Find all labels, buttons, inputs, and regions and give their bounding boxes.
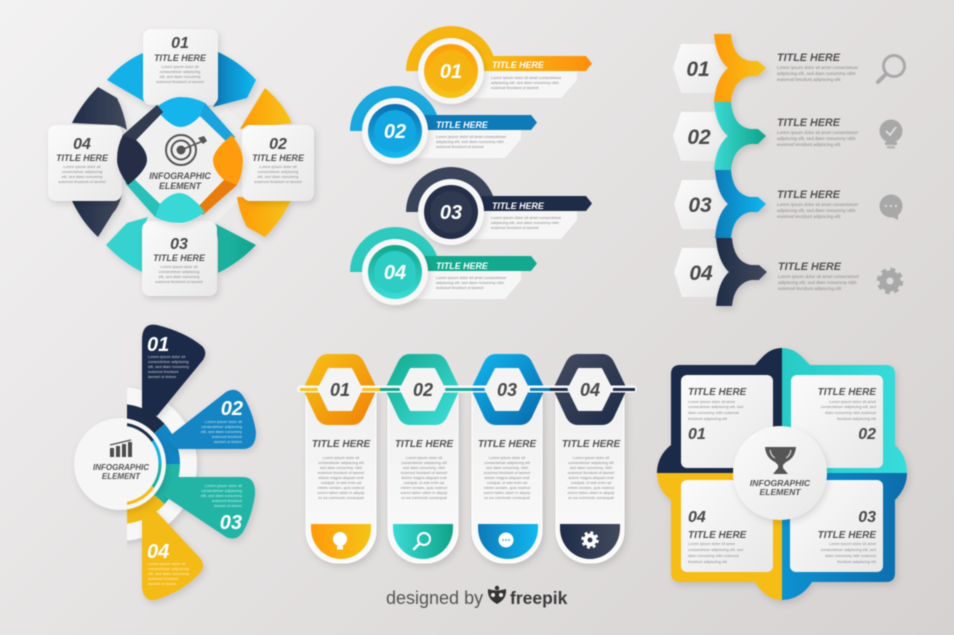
step 04 <box>674 238 860 306</box>
item 03 <box>406 167 592 245</box>
number hexagons <box>319 370 611 410</box>
center label: ELEMENT <box>159 181 202 191</box>
column 2 text: dolore magna aliquam erat <box>401 476 448 480</box>
column 2 text: Lorem ipsum dolor sit <box>406 456 442 460</box>
petal 04: elit, sed diam nonummy <box>148 571 189 576</box>
column 3 text: dolore magna aliquam erat <box>484 476 531 480</box>
card 04: tincidunt adipiscing elit <box>688 559 728 564</box>
petal 01: consectetuer adipiscing <box>148 359 189 364</box>
card 03: 03 <box>858 509 876 526</box>
card 02: consectetuer adipiscing elit, sed <box>821 404 876 409</box>
card 03: tincidunt adipiscing elit <box>837 559 877 564</box>
step 02 <box>673 102 859 170</box>
card 01: TITLE HERE <box>154 53 207 63</box>
icon: gear <box>879 270 901 292</box>
petal 02 <box>167 390 256 449</box>
column titles <box>312 439 620 450</box>
step 04: adipiscing elit, sed diam nonummy nibh <box>778 280 857 285</box>
icon: freepik logo <box>488 586 506 604</box>
item 02: euismod tincidunt ut laoreet <box>436 144 484 149</box>
item 01: adipiscing elit, sed diam nonummy nibh <box>491 80 559 85</box>
petal 04: euismod tincidunt <box>148 576 179 581</box>
card 01: Lorem ipsum dolor sit amet <box>688 399 735 404</box>
icon block: gear <box>560 524 620 559</box>
column 1 text: volutpat, ut wisi enim ad <box>321 481 361 485</box>
step 04: Lorem ipsum dolor sit amet consectetuer <box>778 274 859 279</box>
item 03: euismod tincidunt ut laoreet <box>491 225 539 230</box>
card 04: euismod tincidunt ut laoreet <box>58 179 107 184</box>
column 1 text: dolore magna aliquam erat <box>318 476 365 480</box>
step 02: TITLE HERE <box>777 117 841 129</box>
center label: ELEMENT <box>102 472 141 481</box>
petal 01: 01 <box>147 334 169 356</box>
column titles: TITLE HERE <box>478 439 536 450</box>
card 01: consectetuer adipiscing <box>160 69 200 74</box>
petal 02: elit, sed diam nonummy <box>201 429 242 434</box>
column cards <box>306 390 624 563</box>
card 03: euismod tincidunt ut laoreet <box>155 279 204 284</box>
column 3 text: exerci tation ullam in aliquip <box>484 491 530 495</box>
card 03: Lorem ipsum dolor sit amet <box>829 541 876 546</box>
column 4 text: consectetuer adipiscing elit <box>568 461 615 465</box>
column 4 text: exerci tation ullam in aliquip <box>568 491 614 495</box>
card 01: 01 <box>688 426 706 443</box>
card 04: 04 <box>688 509 706 526</box>
item 03: Lorem ipsum dolor sit amet consectetuer <box>491 215 561 220</box>
column 2 text: consectetuer adipiscing elit <box>401 461 448 465</box>
center label: ELEMENT <box>759 487 801 497</box>
column 3 text: euismod tincidunt ut laoreet <box>484 471 531 475</box>
card 02: TITLE HERE <box>818 387 876 398</box>
icon block: chat <box>478 524 538 559</box>
petal 03: consectetuer adipiscing <box>201 488 242 493</box>
credit: designed by freepik <box>386 586 568 608</box>
card 04: diam nonummy nibh euismod <box>688 553 739 558</box>
card 03: Lorem ipsum dolor sit <box>160 264 198 269</box>
card 02: consectetuer adipiscing <box>258 169 298 174</box>
card 03: TITLE HERE <box>818 530 876 541</box>
step 03: Lorem ipsum dolor sit amet consectetuer <box>777 202 858 207</box>
step 01: euismod tincidunt adipiscing elit <box>777 77 841 82</box>
card 01 <box>681 375 773 468</box>
card 04 <box>48 125 122 201</box>
card 02: Lorem ipsum dolor sit <box>259 164 297 169</box>
card 02: euismod tincidunt ut laoreet <box>254 179 303 184</box>
hexagon 01 <box>303 354 377 425</box>
card 03 <box>142 221 217 296</box>
credit: designed by freepik: designed by <box>386 588 483 608</box>
step 02: 02 <box>687 126 711 149</box>
petal 04: 04 <box>147 541 169 563</box>
petal 04: consectetuer adipiscing <box>148 566 189 571</box>
numbers: 03 <box>497 380 517 400</box>
card 04: Lorem ipsum dolor sit <box>63 164 101 169</box>
numbers: 02 <box>413 380 433 400</box>
panel: four corner quadrant <box>657 348 907 600</box>
item 01: euismod tincidunt ut laoreet <box>491 85 539 90</box>
step 03: euismod tincidunt adipiscing elit <box>777 214 841 219</box>
hexagon 02 <box>385 354 460 425</box>
central ring <box>109 89 251 231</box>
column 4 text: sed diam nonummy, nibh <box>570 466 612 470</box>
petal 02: Lorem ipsum dolor sit <box>205 419 242 424</box>
petal 03 <box>163 477 255 539</box>
step 03: 03 <box>688 194 712 217</box>
card 03: TITLE HERE <box>153 253 206 263</box>
item 01: TITLE HERE <box>492 60 545 70</box>
petal 03: euismod tincidunt <box>212 498 243 503</box>
card 02: elit, sed diam nonummy <box>257 174 299 179</box>
numbers <box>330 380 600 400</box>
center circle <box>733 426 827 520</box>
step 01: adipiscing elit, sed diam nonummy nibh <box>777 71 856 76</box>
hexagon 04 <box>553 354 627 425</box>
card 04: TITLE HERE <box>56 153 109 163</box>
card 03: elit, sed diam nonummy <box>158 274 200 279</box>
column titles: TITLE HERE <box>562 439 620 450</box>
light diamond backing <box>81 61 279 259</box>
petal 01: laoreet ut dolore <box>148 374 176 379</box>
column 2 text: exerci tation ullam in aliquip <box>401 491 447 495</box>
card 03: 03 <box>170 236 188 253</box>
step 01: Lorem ipsum dolor sit amet consectetuer <box>777 65 858 70</box>
fan rings <box>126 388 201 546</box>
column 1 text: minim veniam, quis nostrud <box>318 486 364 490</box>
hexagon 03 <box>471 354 545 425</box>
step 03 <box>674 170 859 238</box>
column 4 text: minim veniam, quis nostrud <box>568 486 614 490</box>
column 4 text: volutpat, ut wisi enim ad <box>571 481 611 485</box>
column 2 text: minim veniam, quis nostrud <box>401 486 447 490</box>
panel: circular infographic <box>48 29 314 296</box>
step 03: TITLE HERE <box>777 189 841 201</box>
card 01: euismod tincidunt ut laoreet <box>156 79 205 84</box>
icon: bar chart <box>110 440 132 457</box>
card 04: consectetuer adipiscing elit, sed <box>688 547 743 552</box>
item 04: 04 <box>384 262 406 284</box>
step 01: 01 <box>686 58 710 81</box>
center circle <box>74 418 166 510</box>
item 02 <box>350 86 537 164</box>
step 03: adipiscing elit, sed diam nonummy nibh <box>777 208 856 213</box>
petal 03: Lorem ipsum dolor sit <box>205 483 242 488</box>
petal 02: consectetuer adipiscing <box>201 424 242 429</box>
card 01: Lorem ipsum dolor sit <box>161 64 199 69</box>
item 02: 02 <box>384 121 406 143</box>
petal 04 <box>142 512 203 600</box>
numbers: 01 <box>330 380 350 400</box>
card 03 <box>790 480 883 572</box>
column 3 text: minim veniam, quis nostrud <box>484 486 530 490</box>
icon block: magnifier <box>393 524 453 559</box>
icon: magnifier <box>878 56 904 82</box>
step 01 <box>673 34 859 102</box>
connecting line <box>297 386 637 392</box>
card 02: Lorem ipsum dolor sit amet <box>829 399 876 404</box>
column 3 text: volutpat, ut wisi enim ad <box>487 481 527 485</box>
item 04: Lorem ipsum dolor sit amet consectetuer <box>436 275 506 280</box>
column 4 text: euismod tincidunt ut laoreet <box>568 471 615 475</box>
step 04: TITLE HERE <box>778 261 842 273</box>
item 04: adipiscing elit, sed diam nonummy nibh <box>436 280 504 285</box>
card 03: diam nonummy nibh euismod <box>825 553 876 558</box>
petal 04: laoreet ut dolore <box>148 581 176 586</box>
column 1 text: ex ea commodo consequat <box>318 496 365 500</box>
card 04: Lorem ipsum dolor sit amet <box>688 541 735 546</box>
petal 01: euismod tincidunt <box>148 369 179 374</box>
column 3 text: Lorem ipsum dolor sit <box>489 456 525 460</box>
center label: INFOGRAPHIC <box>93 463 149 472</box>
petal 03: elit, sed diam nonummy <box>201 493 242 498</box>
step 02: Lorem ipsum dolor sit amet consectetuer <box>777 130 858 135</box>
column 3 text: consectetuer adipiscing elit <box>484 461 531 465</box>
column 1 text: euismod tincidunt ut laoreet <box>318 471 365 475</box>
credit: designed by freepik: freepik <box>510 588 568 608</box>
card 04 <box>681 480 773 572</box>
column titles: TITLE HERE <box>395 439 453 450</box>
petal 04: Lorem ipsum dolor sit <box>148 561 185 566</box>
card 01: 01 <box>171 35 189 52</box>
petal 03: laoreet ut dolore <box>214 503 242 508</box>
card 02: 02 <box>269 136 287 153</box>
step 04: 04 <box>689 262 713 285</box>
step 04: euismod tincidunt adipiscing elit <box>778 286 842 291</box>
column titles: TITLE HERE <box>312 439 370 450</box>
card 03: consectetuer adipiscing <box>159 269 199 274</box>
panel: fan infographic <box>74 324 260 605</box>
outer petals <box>72 52 292 273</box>
icon: light bulb <box>880 120 902 148</box>
column 2 text: ex ea commodo consequat <box>401 496 448 500</box>
petal 02: laoreet ut dolore <box>214 439 242 444</box>
step 01: TITLE HERE <box>777 52 841 64</box>
column 1 text: consectetuer adipiscing elit <box>318 461 365 465</box>
item 03: adipiscing elit, sed diam nonummy nibh <box>491 220 559 225</box>
icon block: bulb <box>311 524 371 559</box>
item 01: Lorem ipsum dolor sit amet consectetuer <box>491 75 561 80</box>
card 03: consectetuer adipiscing elit, sed <box>821 547 876 552</box>
card 01: TITLE HERE <box>688 387 747 398</box>
column 1 text: exerci tation ullam in aliquip <box>318 491 364 495</box>
panel: vertical connected steps <box>673 34 904 306</box>
card 04: elit, sed diam nonummy <box>61 174 103 179</box>
column 1 text: sed diam nonummy, nibh <box>320 466 362 470</box>
numbers: 04 <box>580 380 600 400</box>
card 02: 02 <box>858 426 876 443</box>
item 02: Lorem ipsum dolor sit amet consectetuer <box>436 134 506 139</box>
item 02: TITLE HERE <box>436 120 489 130</box>
item 04: TITLE HERE <box>436 261 489 271</box>
column 1 text: Lorem ipsum dolor sit <box>323 456 359 460</box>
item 04 <box>350 227 537 305</box>
card 04: TITLE HERE <box>688 530 747 541</box>
column 4 text: ex ea commodo consequat <box>568 496 615 500</box>
card 01: consectetuer adipiscing elit, sed <box>688 404 743 409</box>
panel: numbered badges list <box>350 26 592 305</box>
card 01: tincidunt adipiscing elit <box>688 416 728 421</box>
panel: four column pills <box>297 354 637 563</box>
item 01: 01 <box>440 61 462 83</box>
card 02 <box>242 125 314 201</box>
icon: target <box>166 135 207 165</box>
petal 02: euismod tincidunt <box>212 434 243 439</box>
item 03: 03 <box>440 202 462 224</box>
step 02: adipiscing elit, sed diam nonummy nibh <box>777 136 856 141</box>
card 01: elit, sed diam nonummy <box>159 74 201 79</box>
petal 01: elit, sed diam nonummy <box>148 364 189 369</box>
card 01 <box>143 29 218 105</box>
card 02: TITLE HERE <box>252 153 305 163</box>
center label: INFOGRAPHIC <box>750 478 810 488</box>
petal 01 <box>142 325 205 416</box>
icon: chat bubble <box>880 194 902 220</box>
colored quadrants <box>657 348 907 600</box>
item 03: TITLE HERE <box>492 201 545 211</box>
column 4 text: dolore magna aliquam erat <box>568 476 615 480</box>
icon: trophy <box>765 447 796 474</box>
card 02: diam nonummy nibh euismod <box>825 410 876 415</box>
column 3 text: ex ea commodo consequat <box>484 496 531 500</box>
item 01 <box>406 26 592 104</box>
petal 01: Lorem ipsum dolor sit <box>148 354 185 359</box>
card 02 <box>791 375 883 468</box>
item 04: euismod tincidunt ut laoreet <box>436 285 484 290</box>
card 04: 04 <box>73 136 91 153</box>
column 3 text: sed diam nonummy, nibh <box>486 466 528 470</box>
step 02: euismod tincidunt adipiscing elit <box>777 142 841 147</box>
card 04: consectetuer adipiscing <box>62 169 102 174</box>
column 2 text: volutpat, ut wisi enim ad <box>404 481 444 485</box>
card 01: diam nonummy nibh euismod <box>688 410 739 415</box>
petal 02: 02 <box>221 398 243 420</box>
item 02: adipiscing elit, sed diam nonummy nibh <box>436 139 504 144</box>
column 4 text: Lorem ipsum dolor sit <box>573 456 609 460</box>
card 02: tincidunt adipiscing elit <box>837 416 877 421</box>
center label: INFOGRAPHIC <box>149 171 211 181</box>
column 2 text: sed diam nonummy, nibh <box>403 466 445 470</box>
petal 03: 03 <box>220 512 242 534</box>
column 2 text: euismod tincidunt ut laoreet <box>401 471 448 475</box>
